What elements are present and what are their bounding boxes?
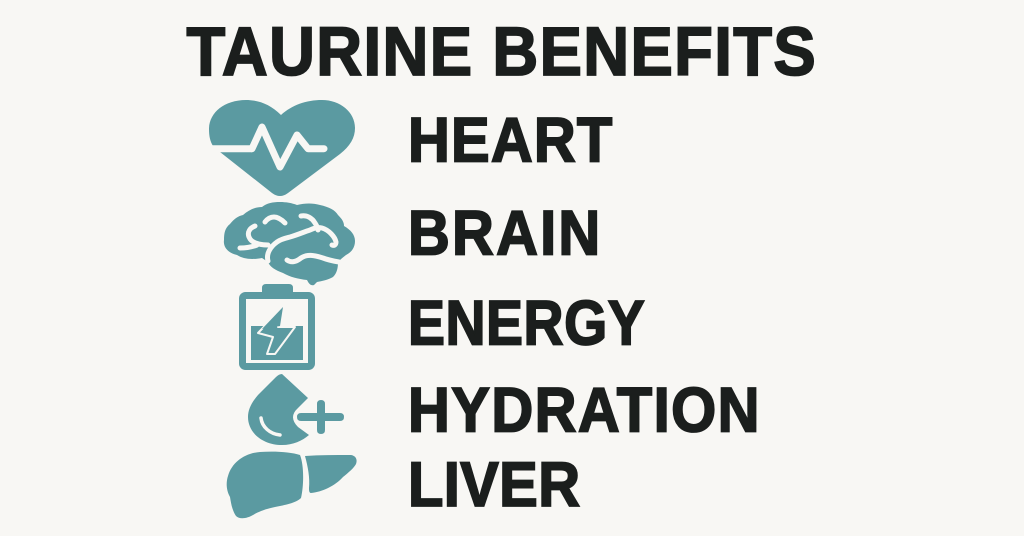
label: heart: HEART [408,104,612,175]
icon: liver [227,452,357,518]
title: TAURINE BENEFITS [186,14,816,91]
label: hydration: HYDRATION [408,374,759,445]
icon: heart with pulse [205,100,355,196]
icon: water drop with plus [248,374,344,445]
icon: brain [224,202,355,285]
icon: battery with bolt [242,284,312,366]
label: brain: BRAIN [408,197,600,268]
label: liver: LIVER [408,449,580,520]
label: energy: ENERGY [408,287,645,358]
